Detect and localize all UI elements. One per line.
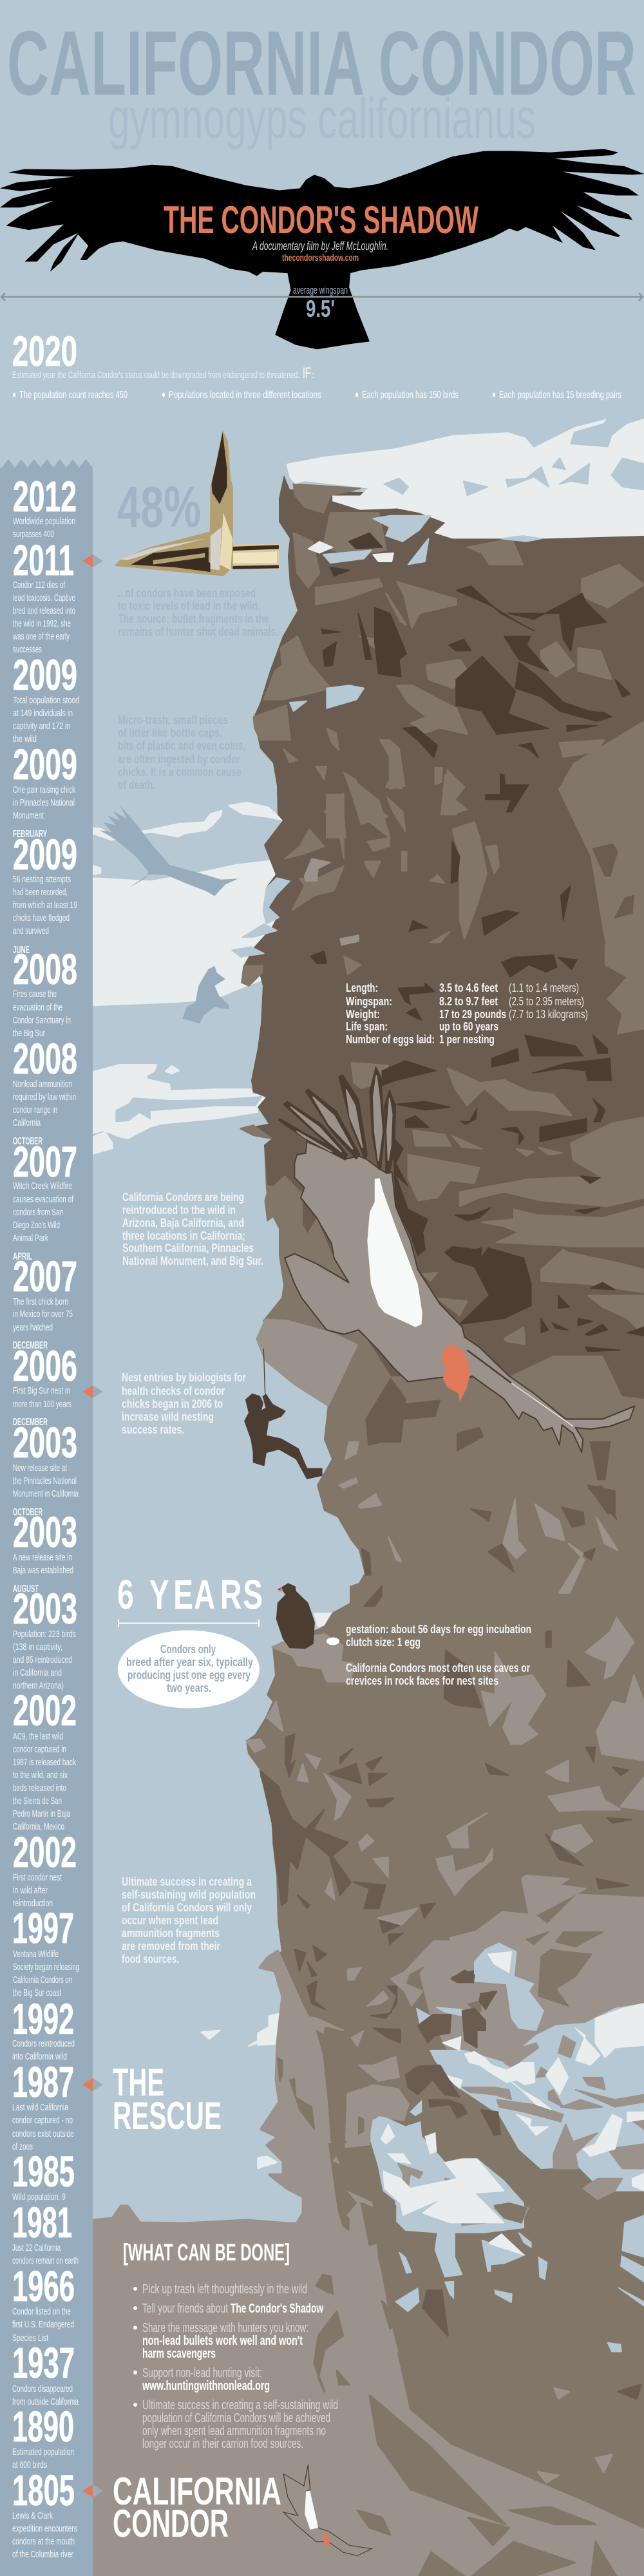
entry 2008: 2008 — [13, 1035, 77, 1083]
wingspan label: average wingspan — [293, 284, 348, 296]
nesting facts: crevices in rock faces for nest sites — [346, 1674, 498, 1687]
entry 2009 pinnacles: One pair raising chick — [13, 784, 75, 795]
what can be done list: Support non-lead hunting visit: — [142, 2366, 262, 2380]
nesting facts: gestation: about 56 days for egg incubation — [346, 1623, 531, 1636]
entry 2009 population: at 149 individuals in — [13, 708, 73, 719]
entry 1987 — [12, 2058, 74, 2152]
entry December 2003 — [13, 1417, 79, 1499]
entry October 2007: Diego Zoo's Wild — [13, 1220, 60, 1231]
entry February 2009: from which at least 19 — [13, 900, 77, 911]
condor stats: 3.5 to 4.6 feet — [439, 981, 498, 994]
entry 1805: condors at the mouth — [12, 2536, 75, 2547]
entry August 2003: Population: 223 birds — [13, 1629, 76, 1640]
entry October 2007: Animal Park — [13, 1233, 48, 1244]
nest entries text: success rates. — [122, 1423, 184, 1436]
snow: blue gaps — [290, 415, 644, 711]
entry 1985: 1985 — [12, 2148, 75, 2196]
entry 2002 nest — [13, 1828, 77, 1909]
big condor illustration — [279, 1067, 635, 1452]
breeding callout: producing just one egg every — [128, 1669, 251, 1681]
entry 2002 nest: in wild after — [13, 1885, 48, 1896]
breeding callout: breed after year six, typically — [126, 1656, 253, 1669]
rock texture: dark patches on mid zone — [260, 844, 634, 1982]
entry 1981 — [12, 2199, 79, 2266]
entry 1997 — [12, 1904, 79, 1998]
entry 1937: from outside California — [12, 2396, 79, 2407]
entry October 2003 — [13, 1507, 77, 1576]
rock texture: mid patches on dark zone (upper) — [254, 484, 644, 838]
entry 1987: Last wild California — [12, 2102, 68, 2113]
ultimate success text: Ultimate success in creating a — [122, 1875, 252, 1888]
entry 2002 AC9: 1987 is released back — [13, 1757, 76, 1768]
entry February 2009 — [13, 829, 77, 936]
entry 1997: 1997 — [12, 1904, 74, 1953]
micro-trash text — [118, 714, 245, 791]
entry October 2003: A new release site in — [13, 1552, 72, 1563]
cave: dark rock patches — [294, 1933, 500, 2136]
entry 1992: into California wild — [12, 2051, 67, 2062]
entry 1805: 1805 — [12, 2467, 75, 2515]
film credit: A documentary film by Jeff McLoughlin. — [252, 240, 388, 252]
ultimate success text: ammunition fragments — [122, 1927, 220, 1940]
reintroduction text — [122, 1191, 263, 1267]
lead text — [118, 587, 278, 638]
cave: rock scribbles light — [398, 2036, 644, 2225]
condor stats: Length: — [346, 981, 378, 994]
egg icon — [327, 1637, 339, 1645]
entry 2009 pinnacles: 2009 — [13, 741, 77, 789]
entry 1992 — [12, 1995, 75, 2062]
entry 1890: Estimated population — [12, 2447, 74, 2458]
2020 goal block — [12, 327, 621, 401]
ultimate success text — [122, 1875, 256, 1965]
entry 1890: at 600 birds — [12, 2459, 47, 2470]
reintroduction text: reintroduced to the wild in — [122, 1204, 236, 1217]
reintroduction text: three locations in California; — [122, 1229, 245, 1242]
entry 2009 population: the wild — [13, 734, 37, 744]
entry 1805: expedition encounters — [12, 2523, 77, 2534]
2020 conditions: Each population has 150 birds — [362, 390, 459, 401]
sky clouds — [93, 802, 283, 2168]
the rescue heading — [113, 2061, 222, 2137]
california condor footer heading: CONDOR — [113, 2502, 229, 2545]
what can be done heading: [WHAT CAN BE DONE] — [123, 2239, 290, 2266]
rock flakes on clouds — [240, 966, 272, 1139]
the rescue heading: THE — [113, 2061, 164, 2104]
2020 sentence: Estimated year the California Condor's status could be downgraded from endangered to threatened. — [12, 370, 299, 381]
entry 2008: condor range in — [13, 1104, 57, 1115]
entry 2002 AC9: Pedro Martir in Baja — [13, 1808, 70, 1819]
2020 conditions: The population count reaches 450 — [19, 390, 128, 401]
entry June 2008: Fires cause the — [13, 989, 57, 999]
condor silhouette with film title — [0, 149, 644, 349]
entry December 2006: 2006 — [13, 1342, 77, 1390]
what can be done list: longer occur in their carrion food sources. — [142, 2437, 303, 2451]
what can be done list — [133, 2282, 338, 2451]
bottom rock: mid zones — [314, 2203, 644, 2576]
entry December 2003: the Pinnacles National — [13, 1475, 77, 1486]
entry December 2006: First Big Sur nest in — [13, 1385, 70, 1396]
micro-trash text: Micro-trash, small pieces — [118, 714, 228, 726]
entry 1992: 1992 — [12, 1995, 74, 2043]
timeline markers — [82, 554, 103, 2497]
entry December 2006: more than 100 years — [13, 1399, 71, 1410]
entry February 2009: had been recorded, — [13, 887, 68, 898]
entry 1997: Society began releasing — [13, 1962, 79, 1973]
ultimate success text: food sources. — [122, 1953, 179, 1965]
entry October 2003: OCTOBER — [13, 1507, 43, 1518]
entry June 2008: JUNE — [13, 945, 30, 956]
cliff: base rock silhouette — [93, 475, 644, 2576]
entry 2002 AC9 — [13, 1687, 77, 1832]
entry October 2007: 2007 — [13, 1138, 77, 1186]
entry 2009 population: captivity and 172 in — [13, 721, 70, 732]
micro-trash text: of death. — [118, 779, 155, 791]
what can be done list: population of California Condors will be achieved — [142, 2411, 330, 2425]
entry 1805 — [12, 2467, 77, 2560]
entry October 2007: Witch Creek Wildfire — [13, 1180, 72, 1191]
entry 2008: required by law within — [13, 1092, 76, 1103]
entry 1997: Ventana Wildlife — [13, 1949, 59, 1960]
entry October 2007: OCTOBER — [13, 1136, 43, 1147]
entry 2011: Condor 112 dies of — [13, 580, 66, 591]
condor stats: Life span: — [346, 1020, 388, 1033]
cliff: light lower rock — [93, 1320, 644, 2576]
entry October 2007: causes evacuation of — [13, 1194, 74, 1205]
entry August 2003: northern Arizona) — [13, 1680, 64, 1691]
entry December 2006: DECEMBER — [13, 1340, 48, 1351]
48 percent stat: 48% — [117, 475, 201, 540]
entry June 2008: the Big Sur — [13, 1028, 45, 1039]
entry April 2007: The first chick born — [13, 1296, 68, 1307]
condor stats: (2.5 to 2.95 meters) — [509, 995, 584, 1008]
entry 2009 pinnacles: in Pinnacles National — [13, 797, 75, 808]
entry December 2003: DECEMBER — [13, 1417, 48, 1428]
entry February 2009: 2009 — [13, 831, 77, 879]
entry 2002 AC9: birds released into — [13, 1783, 66, 1794]
small condor outline — [283, 2465, 372, 2556]
entry February 2009: chicks have fledged — [13, 913, 70, 923]
entry April 2007: years hatched — [13, 1322, 53, 1333]
entry October 2007: condors from San — [13, 1207, 63, 1218]
nesting facts: California Condors most often use caves or — [346, 1662, 530, 1674]
entry 1937: 1937 — [12, 2339, 75, 2387]
entry December 2003: Monument in California — [13, 1488, 79, 1499]
perched condor — [276, 1583, 332, 1649]
what can be done list: Pick up trash left thoughtlessly in the wild — [142, 2282, 307, 2297]
film title: THE CONDOR'S SHADOW — [164, 198, 478, 242]
entry 1966: Species List — [12, 2333, 49, 2344]
what can be done list: non-lead bullets work well and won't — [142, 2334, 303, 2348]
micro-trash text: chicks. It is a common cause — [118, 766, 242, 779]
what can be done list: www.huntingwithnonlead.org — [142, 2379, 270, 2393]
entry 1987: condor captured - no — [12, 2115, 73, 2126]
entry 1981: condors remain on earth — [12, 2255, 79, 2266]
cave: light column details — [278, 2058, 364, 2293]
entry October 2003: Baja was established — [13, 1565, 73, 1576]
2020 sentence — [12, 365, 314, 382]
entry 2009 population — [13, 651, 79, 744]
entry 2002 AC9: AC9, the last wild — [13, 1731, 63, 1742]
entry 2002 nest: First condor nest — [13, 1872, 62, 1883]
flying condor silhouette one — [100, 806, 238, 896]
ultimate success text: self-sustaining wild population — [122, 1888, 256, 1901]
entry 2011: 2011 — [13, 536, 74, 585]
entry 1890 — [12, 2403, 74, 2470]
condor stats: 17 to 29 pounds — [439, 1008, 506, 1021]
nesting facts — [346, 1623, 531, 1687]
entry 2011: was one of the early — [12, 631, 70, 642]
what can be done list: Tell your friends about — [142, 2302, 228, 2316]
condor stats: Weight: — [346, 1008, 380, 1021]
rock texture: darkest patches — [310, 533, 644, 1352]
entry 2002 nest: reintroduction — [13, 1898, 53, 1909]
rope line and climber — [245, 1349, 322, 1479]
entry 1985 — [12, 2148, 75, 2202]
entry 1966 — [12, 2262, 75, 2344]
lead text: remains of hunter shot dead animals. — [118, 625, 278, 638]
entry 2009 population: Total population stood — [13, 695, 79, 706]
entry 2002 AC9: to the wild, and six — [13, 1770, 68, 1781]
entry 2008: California — [13, 1117, 41, 1128]
entry 2011: successes — [13, 644, 42, 655]
reintroduction text: Arizona, Baja California, and — [122, 1217, 244, 1229]
bracket line — [118, 1620, 259, 1627]
nesting facts: clutch size: 1 egg — [346, 1636, 421, 1649]
entry June 2008: evacuation of the — [13, 1002, 62, 1013]
entry 1937 — [12, 2339, 79, 2407]
what can be done list: only when spent lead ammunition fragments no — [142, 2424, 326, 2438]
micro-trash text: are often ingested by condor — [118, 753, 240, 766]
entry 1966: first U.S. Endangered — [12, 2319, 74, 2330]
entry April 2007: 2007 — [13, 1253, 77, 1301]
entry April 2007: APRIL — [13, 1251, 32, 1262]
rock texture: mid bands lower dark zone — [265, 1063, 644, 1344]
2020 conditions — [13, 390, 621, 401]
wingspan measure — [1, 284, 643, 322]
entry 1987: condors exist outside — [12, 2128, 74, 2139]
breeding callout: Condors only — [160, 1643, 216, 1656]
ultimate success text: occur when spent lead — [122, 1914, 218, 1927]
entry August 2003: AUGUST — [13, 1584, 39, 1595]
2020 sentence: IF — [303, 365, 311, 382]
condor stats — [346, 981, 588, 1046]
entry August 2003 — [13, 1584, 77, 1691]
rock texture: light patches on mid zone — [246, 1442, 644, 1981]
entry 1805: of the Columbia river — [12, 2549, 73, 2560]
california condor footer heading: CALIFORNIA — [113, 2470, 281, 2513]
entry 2012: 2012 — [13, 473, 77, 521]
snow: white flakes — [308, 542, 393, 562]
entry April 2007: in Mexico for over 75 — [13, 1309, 73, 1320]
2020 goal block: 2020 — [12, 327, 77, 375]
entry June 2008: 2008 — [13, 945, 77, 994]
ultimate success text: of California Condors will only — [122, 1901, 252, 1914]
cliff: dark upper rock — [240, 475, 644, 1399]
snow cap on cliff top — [286, 415, 644, 711]
nest entries text: health checks of condor — [122, 1385, 225, 1397]
entry 2009 pinnacles — [13, 741, 77, 821]
what can be done list: Share the message with hunters you know: — [142, 2321, 308, 2335]
lead text: The source: bullet fragments in the — [118, 612, 269, 625]
reintroduction text: Southern California, Pinnacles — [122, 1242, 254, 1255]
entry February 2009: 56 nesting attempts — [13, 874, 71, 885]
entry 1966: Condor listed on the — [12, 2306, 71, 2317]
entry August 2003: (138 in captivity, — [13, 1642, 62, 1653]
entry 2012: Worldwide population — [13, 516, 75, 527]
entry 1966: 1966 — [12, 2262, 75, 2311]
cave: white snow patches — [381, 1952, 644, 2255]
california condor footer heading — [113, 2470, 281, 2545]
entry December 2006 — [13, 1340, 77, 1410]
condor stats: 8.2 to 9.7 feet — [439, 995, 498, 1008]
entry February 2009: FEBRUARY — [13, 829, 47, 840]
timeline sidebar — [0, 459, 93, 2576]
wingspan value: 9.5' — [306, 296, 335, 322]
entry 1997: California Condors on — [13, 1975, 72, 1985]
entry 1981: Just 22 California — [12, 2242, 61, 2253]
breeding callout: two years. — [167, 1681, 211, 1694]
lead text: ...of condors have been exposed — [118, 587, 256, 600]
entry 1987: 1987 — [12, 2058, 74, 2107]
entry 2012 — [13, 473, 77, 540]
2020 conditions: Populations located in three different locations — [169, 390, 321, 401]
the rescue heading: RESCUE — [113, 2094, 222, 2137]
film url: thecondorsshadow.com — [282, 252, 359, 263]
entry 1992: Condors reintroduced — [12, 2038, 75, 2049]
entry October 2007 — [13, 1136, 77, 1244]
entry 2008: Nonlead ammunition — [13, 1079, 72, 1090]
2020 sentence: : — [312, 370, 314, 381]
lead text: to toxic levels of lead in the wild. — [118, 600, 260, 612]
entry 2011: the wild in 1992, she — [13, 618, 71, 629]
what can be done list: The Condor's Shadow — [231, 2302, 323, 2316]
condor stats: 1 per nesting — [439, 1033, 495, 1046]
entry 2008 — [13, 1035, 77, 1128]
flying condor silhouette two — [182, 966, 229, 1023]
cave: light island inside mid rock — [346, 2086, 408, 2146]
what can be done list: Ultimate success in creating a self-sustaining wild — [142, 2398, 338, 2412]
entry June 2008: Condor Sanctuary in — [13, 1015, 71, 1026]
breeding callout — [118, 1631, 260, 1708]
condor: wing feathers — [279, 1067, 395, 1173]
cave: mid rock above cave — [329, 1932, 625, 2318]
condor stats: (7.7 to 13 kilograms) — [509, 1008, 588, 1021]
entry October 2003: 2003 — [13, 1508, 77, 1557]
entry 1987: of zoos — [12, 2141, 33, 2152]
nest entries text: chicks began in 2006 to — [122, 1397, 223, 1410]
entry 2002 AC9: 2002 — [13, 1687, 77, 1735]
entry April 2007 — [13, 1251, 77, 1333]
entry 2002 AC9: condor captured in — [13, 1744, 66, 1755]
entry 2011 — [12, 536, 75, 655]
ultimate success text: are removed from their — [122, 1940, 220, 1953]
entry August 2003: and 85 reintroduced — [13, 1654, 72, 1665]
reintroduction text: California Condors are being — [122, 1191, 244, 1204]
entry 1997: the Big Sur coast — [13, 1987, 62, 1998]
entry December 2003: 2003 — [13, 1419, 77, 1467]
entry 2012: surpasses 400 — [13, 529, 54, 540]
icon: bullets — [114, 430, 279, 576]
reintroduction text: National Monument, and Big Sur. — [122, 1255, 263, 1267]
condor: orange head — [441, 1344, 469, 1402]
entry December 2003: New release site at — [13, 1463, 68, 1473]
entry 1890: 1890 — [12, 2403, 74, 2451]
entry 2002 AC9: California, Mexico — [13, 1821, 64, 1832]
entry 2009 population: 2009 — [13, 651, 77, 699]
entry 2011: lead toxicosis. Captive — [13, 592, 75, 603]
blue sky showing through cliff (lower cave) — [278, 1932, 644, 2318]
entry 2011: bred and released into — [13, 605, 75, 616]
entry June 2008 — [13, 945, 77, 1039]
entry 2002 AC9: the Sierra de San — [13, 1795, 62, 1806]
entry 1985: Wild population: 9 — [12, 2192, 66, 2202]
nest entries text: increase wild nesting — [122, 1410, 214, 1423]
entry 1981: 1981 — [12, 2199, 72, 2247]
micro-trash text: bits of plastic and even coins, — [118, 739, 245, 752]
entry 2002 nest: 2002 — [13, 1828, 77, 1877]
micro-trash text: of litter like bottle caps, — [118, 726, 222, 739]
6 years heading: 6YEARS — [117, 1572, 263, 1618]
what can be done list: harm scavengers — [142, 2347, 216, 2361]
condor stats: up to 60 years — [439, 1020, 498, 1033]
entry 1805: Lewis & Clark — [12, 2510, 53, 2521]
condor stats: (1.1 to 1.4 meters) — [509, 981, 579, 994]
entry August 2003: 2003 — [13, 1585, 77, 1633]
entry 2009 pinnacles: Monument — [13, 810, 44, 821]
entry February 2009: and survived — [13, 925, 49, 936]
condor: white underwing — [367, 1178, 422, 1327]
nest entries text: Nest entries by biologists for — [122, 1371, 246, 1384]
nest entries text — [122, 1371, 246, 1436]
entry August 2003: in California and — [13, 1667, 62, 1678]
condor stats: Number of eggs laid: — [346, 1033, 435, 1046]
condor stats: Wingspan: — [346, 995, 392, 1008]
entry 1937: Condors disappeared — [12, 2383, 73, 2394]
